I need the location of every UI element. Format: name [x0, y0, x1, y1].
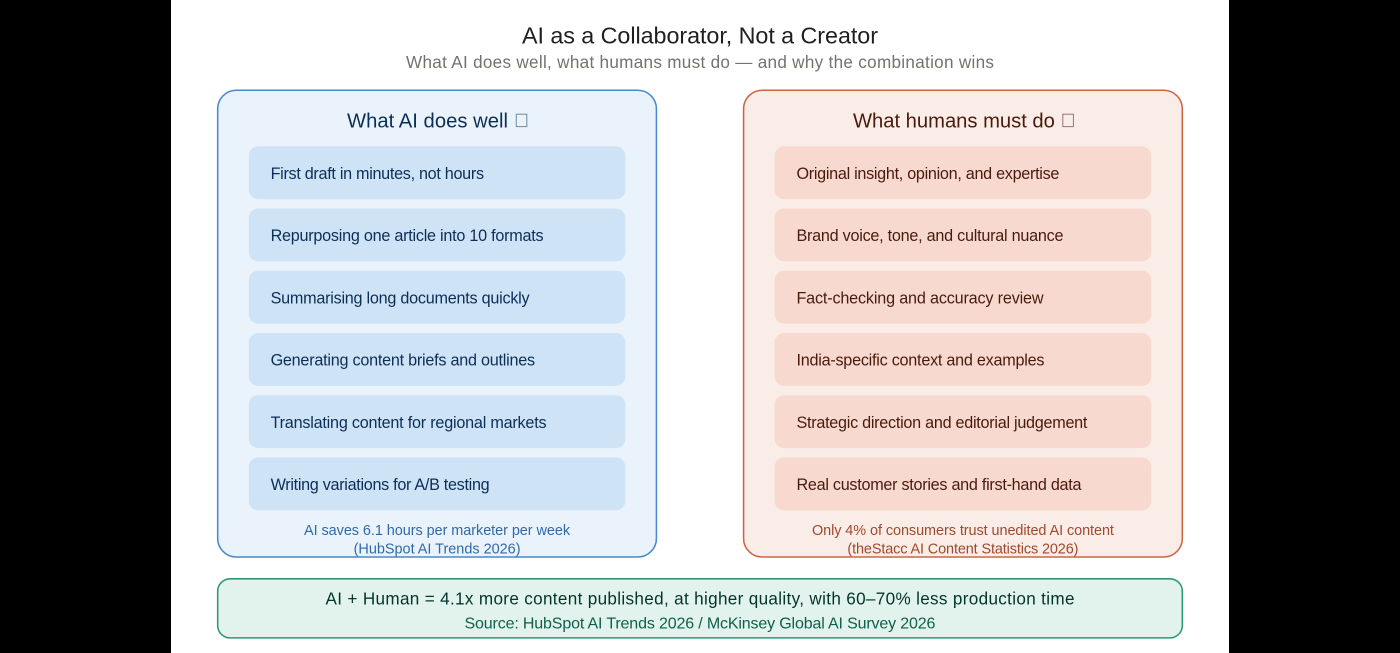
stat note: AI: AI saves 6.1 hours per marketer per week [304, 523, 571, 539]
item: briefs: Generating content briefs and outlines [271, 352, 535, 370]
panel: what AI does well [218, 90, 656, 558]
item: briefs [249, 333, 625, 386]
item: first draft [249, 146, 625, 199]
item: variations [249, 457, 625, 510]
item: strategy [775, 395, 1151, 448]
panel: what humans must do [744, 90, 1182, 558]
banner: combined result [218, 579, 1182, 638]
panel heading: humans: What humans must do [853, 110, 1055, 132]
item: brand voice: Brand voice, tone, and cultural nuance [796, 227, 1063, 245]
item: repurposing: Repurposing one article into 10 formats [271, 227, 544, 245]
stat note: AI [304, 523, 571, 558]
item: customer stories [775, 457, 1151, 510]
title: AI as a Collaborator, Not a Creator [522, 22, 878, 48]
stat note: humans: Only 4% of consumers trust unedited AI content [812, 523, 1114, 539]
banner source: Source: HubSpot AI Trends 2026 / McKinsey Global AI Survey 2026 [465, 615, 936, 633]
stat note: AI: (HubSpot AI Trends 2026) [354, 542, 521, 558]
item: india context [775, 333, 1151, 386]
banner headline: AI + Human = 4.1x more content published, at higher quality, with 60–70% less production time [326, 590, 1074, 609]
item: variations: Writing variations for A/B testing [271, 476, 490, 494]
item: strategy: Strategic direction and editorial judgement [796, 414, 1088, 432]
item: translating: Translating content for regional markets [271, 414, 547, 432]
stat note: humans: (theStacc AI Content Statistics 2026) [847, 542, 1078, 558]
item: india context: India-specific context and examples [796, 352, 1044, 370]
item: insight [775, 146, 1151, 199]
item: summarising: Summarising long documents quickly [271, 289, 531, 307]
panel heading: AI: What AI does well [347, 110, 508, 132]
item: fact-checking [775, 271, 1151, 324]
item: first draft: First draft in minutes, not hours [271, 165, 484, 183]
item: fact-checking: Fact-checking and accuracy review [796, 289, 1044, 307]
infographic canvas [171, 0, 1229, 653]
item: translating [249, 395, 625, 448]
item: summarising [249, 271, 625, 324]
stat note: humans [812, 523, 1114, 558]
item: brand voice [775, 208, 1151, 261]
item: customer stories: Real customer stories and first-hand data [796, 476, 1082, 494]
item: repurposing [249, 208, 625, 261]
subtitle: What AI does well, what humans must do — and why the combination wins [406, 53, 994, 72]
item: insight: Original insight, opinion, and expertise [796, 165, 1059, 183]
